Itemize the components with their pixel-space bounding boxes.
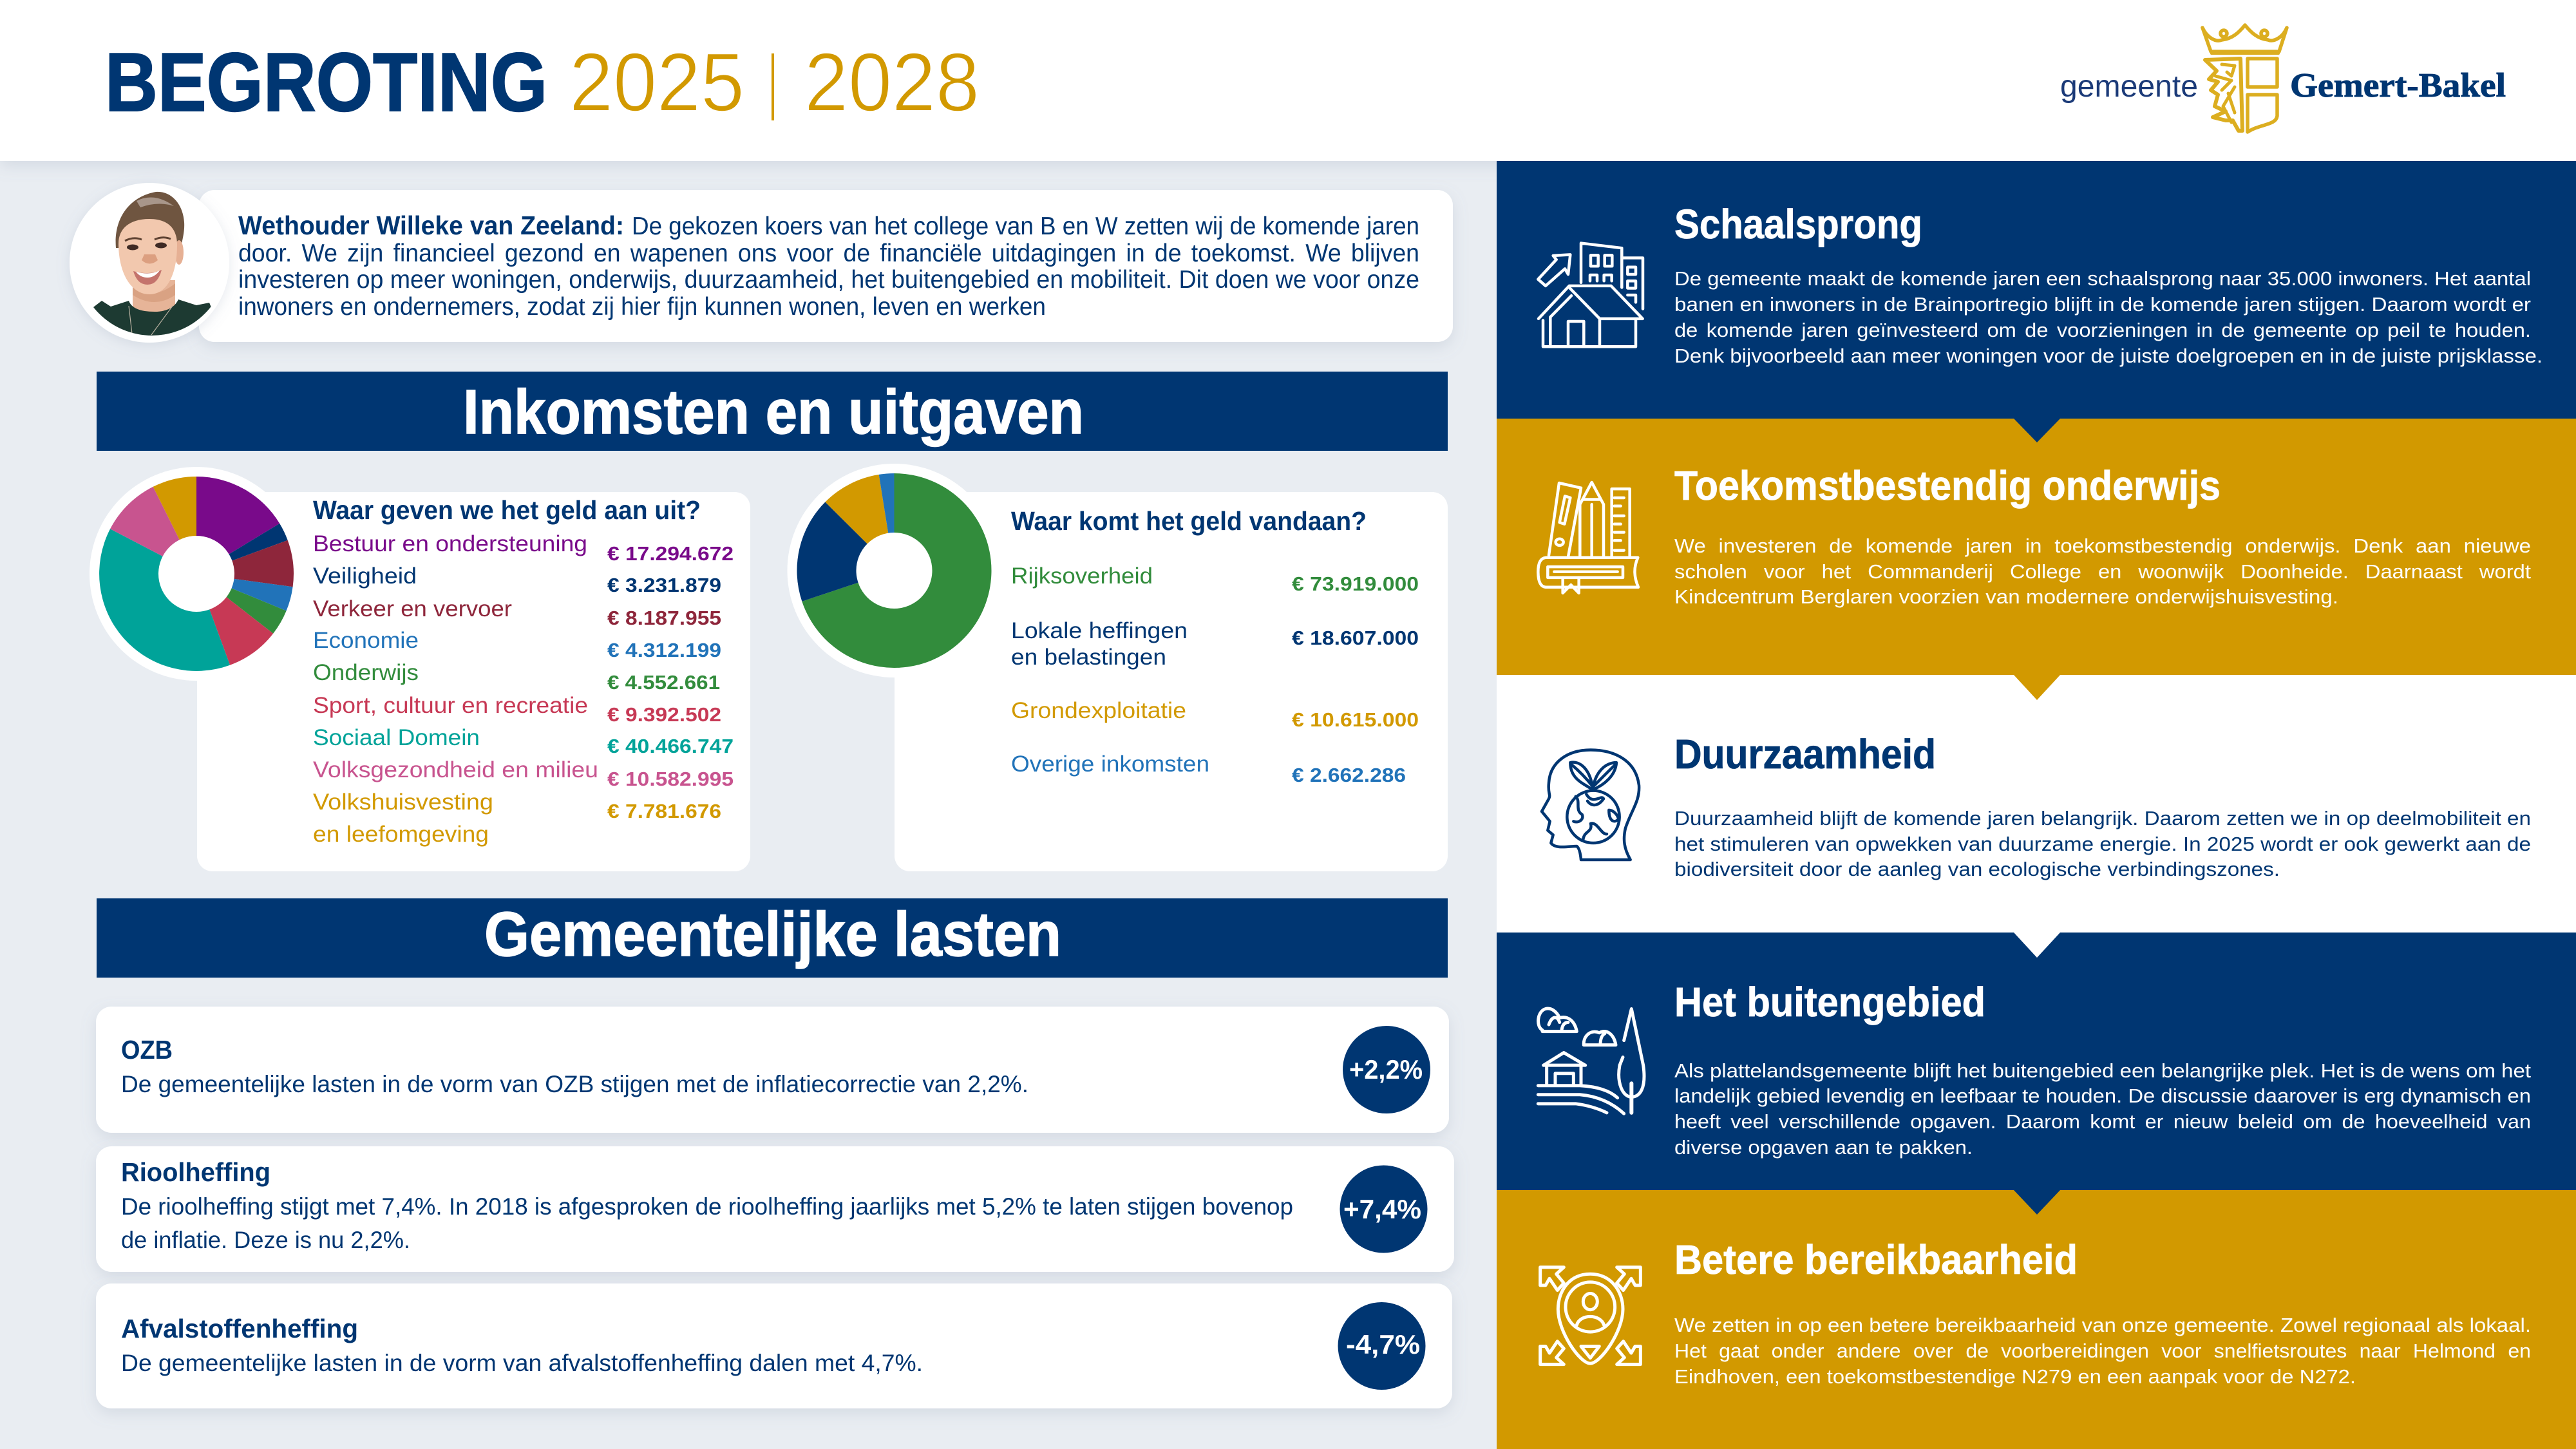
heading: Betere bereikbaarheid	[1674, 1236, 2078, 1283]
amounts: inkomsten: € 2.662.286	[1292, 764, 1406, 786]
amounts: inkomsten: € 18.607.000	[1292, 627, 1419, 649]
heading: inkomsten: Waar komt het geld vandaan?	[1011, 506, 1367, 536]
amounts: uitgaven	[607, 543, 734, 822]
body text: het stimuleren van opwekken van duurzame energie. In 2025 wordt er ook gewerkt aan de	[1674, 833, 2531, 855]
amounts: uitgaven: € 9.392.502	[607, 704, 721, 726]
legend: inkomsten categories: Lokale heffingen	[1011, 618, 1188, 643]
legend: uitgaven categories: Volkshuisvesting	[313, 790, 493, 815]
amounts: uitgaven: € 4.552.661	[607, 672, 720, 694]
donut chart: uitgaven	[90, 467, 303, 681]
legend: uitgaven categories: Veiligheid	[313, 564, 417, 589]
panel: OZB	[96, 1007, 1449, 1133]
body text	[1674, 535, 2531, 608]
panel: Afvalstoffenheffing: Afvalstoffenheffing	[121, 1314, 358, 1343]
title: BEGROTING	[105, 36, 547, 129]
legend: uitgaven categories: Sport, cultuur en recreatie	[313, 693, 588, 718]
title	[105, 36, 980, 129]
panel: Rioolheffing: de inflatie. Deze is nu 2,2%.	[121, 1227, 410, 1253]
body text: diverse opgaven aan te pakken.	[1674, 1136, 1973, 1159]
heading banner: Gemeentelijke lasten: Gemeentelijke lasten	[484, 899, 1061, 969]
body text: scholen voor het Commanderij College en woonwijk Doonheide. Daarnaast wordt	[1674, 560, 2531, 583]
heading: Toekomstbestendig onderwijs	[1674, 462, 2221, 509]
portrait photo	[70, 183, 229, 343]
legend: uitgaven categories: Verkeer en vervoer	[313, 596, 512, 621]
amounts: uitgaven: € 3.231.879	[607, 574, 721, 596]
body text	[1674, 807, 2531, 880]
panel: Rioolheffing	[96, 1146, 1454, 1272]
legend: uitgaven categories: en leefomgeving	[313, 822, 489, 847]
panel: OZB: OZB	[121, 1035, 173, 1065]
body text: De gemeente maakt de komende jaren een schaalsprong naar 35.000 inwoners. Het aantal	[1674, 267, 2531, 290]
intro text: inwoners en ondernemers, zodat zij hier fijn kunnen wonen, leven en werken	[238, 293, 1046, 321]
header band	[0, 0, 2576, 161]
heading banner: Inkomsten en uitgaven	[97, 372, 1448, 451]
badge: -4,7%: -4,7%	[1346, 1329, 1420, 1359]
body text	[1674, 1314, 2531, 1388]
panel: Afvalstoffenheffing	[96, 1283, 1452, 1408]
logo: gemeente Gemert-Bakel	[2060, 25, 2506, 132]
body text: landelijk gebied levendig en leefbaar te houden. De discussie daarover is erg dynamisch en	[1674, 1084, 2531, 1107]
badge: -4,7%	[1338, 1302, 1426, 1390]
body text: de komende jaren geïnvesteerd om de voorzieningen in de gemeente op peil te houden.	[1674, 319, 2531, 341]
body text: We investeren de komende jaren in toekomstbestendig onderwijs. Denk aan nieuwe	[1674, 535, 2531, 557]
legend: inkomsten categories: Overige inkomsten	[1011, 752, 1209, 777]
body text: Denk bijvoorbeeld aan meer woningen voor de juiste doelgroepen en in de juiste prijsklasse.	[1674, 345, 2543, 367]
icon: rural landscape with barn and tree	[1538, 1009, 1644, 1113]
legend: uitgaven categories: Economie	[313, 628, 419, 653]
arrow: gold to white	[2014, 675, 2060, 700]
heading banner: Gemeentelijke lasten	[97, 898, 1448, 978]
badge: +2,2%	[1343, 1026, 1430, 1113]
legend: inkomsten categories: Rijksoverheid	[1011, 564, 1153, 589]
heading: uitgaven: Waar geven we het geld aan uit?	[313, 495, 701, 525]
panel: Rioolheffing: De rioolheffing stijgt met 7,4%. In 2018 is afgesproken de rioolheffing jaarlijks met 5,2% te laten stijgen bovenop	[121, 1193, 1293, 1220]
heading banner: Inkomsten en uitgaven: Inkomsten en uitgaven	[463, 377, 1084, 447]
panel: Schaalsprong	[1497, 161, 2576, 419]
intro text: Wethouder Willeke van Zeeland:	[238, 211, 624, 240]
amounts: uitgaven: € 40.466.747	[607, 735, 734, 757]
legend: uitgaven categories: Bestuur en ondersteuning	[313, 531, 587, 556]
amounts: inkomsten: € 10.615.000	[1292, 709, 1419, 731]
legend: inkomsten categories: en belastingen	[1011, 645, 1166, 670]
amounts: uitgaven: € 8.187.955	[607, 607, 721, 629]
legend: uitgaven categories: Onderwijs	[313, 660, 419, 685]
legend: inkomsten categories: Grondexploitatie	[1011, 698, 1186, 723]
panel: Duurzaamheid	[1497, 675, 2576, 933]
panel: Afvalstoffenheffing: De gemeentelijke lasten in de vorm van afvalstoffenheffing dalen met 4,7%.	[121, 1350, 923, 1376]
legend: uitgaven categories: Sociaal Domein	[313, 725, 480, 750]
logo: gemeente Gemert-Bakel: gemeente	[2060, 70, 2198, 104]
panel: Het buitengebied	[1497, 933, 2576, 1190]
intro text	[238, 211, 1419, 321]
intro text: investeren op meer woningen, onderwijs, duurzaamheid, het buitengebied en mobiliteit. Dit doen we voor onze	[238, 266, 1419, 294]
badge: +2,2%: +2,2%	[1349, 1054, 1423, 1084]
body text	[1674, 267, 2543, 367]
panel: OZB: De gemeentelijke lasten in de vorm van OZB stijgen met de inflatiecorrectie van 2,2%.	[121, 1071, 1028, 1097]
body text: Kindcentrum Berglaren voorzien van modernere onderwijshuisvesting.	[1674, 585, 2338, 608]
panel: Betere bereikbaarheid	[1497, 1190, 2576, 1449]
heading: Schaalsprong	[1674, 201, 1922, 247]
amounts: uitgaven: € 17.294.672	[607, 543, 734, 565]
body text: Als plattelandsgemeente blijft het buitengebied een belangrijke plek. Het is de wens om het	[1674, 1059, 2531, 1082]
legend: uitgaven categories: Volksgezondheid en milieu	[313, 757, 598, 782]
legend: inkomsten categories	[1011, 564, 1209, 777]
body text: banen en inwoners in de Brainportregio blijft in de komende jaren stijgen. Daarom wordt er	[1674, 293, 2531, 316]
intro text: door. We zijn financieel gezond en wapenen ons voor de financiële uitdagingen in de toekomst. We blijven	[238, 240, 1419, 267]
heading: Duurzaamheid	[1674, 731, 1936, 777]
logo: gemeente Gemert-Bakel: Gemert-Bakel	[2290, 67, 2506, 104]
body text: Eindhoven, een toekomstbestendige N279 en een aanpak voor de N272.	[1674, 1365, 2356, 1388]
icon: location pin with arrows	[1540, 1267, 1640, 1365]
body text	[1674, 1059, 2531, 1159]
title: 2028	[804, 36, 980, 129]
icon: house and buildings with arrow	[1538, 243, 1643, 346]
legend: uitgaven categories	[313, 531, 598, 847]
amounts: inkomsten	[1292, 573, 1419, 786]
panel: waar geven we het geld aan uit	[90, 467, 750, 871]
title: 2025	[569, 36, 744, 129]
amounts: inkomsten: € 73.919.000	[1292, 573, 1419, 595]
panel: wethouder intro	[199, 190, 1453, 342]
panel: waar komt het geld vandaan	[787, 464, 1448, 871]
arrow: white to navy	[2014, 933, 2060, 958]
arrow: navy to gold	[2014, 419, 2060, 442]
body text: Het gaat onder andere over de voorbereidingen voor snelfietsroutes naar Helmond en	[1674, 1340, 2531, 1362]
intro text: De gekozen koers van het college van B en W zetten wij de komende jaren	[632, 213, 1419, 240]
badge: +7,4%: +7,4%	[1343, 1194, 1421, 1224]
icon: head with globe and plant	[1542, 750, 1639, 860]
amounts: uitgaven: € 7.781.676	[607, 800, 721, 822]
amounts: uitgaven: € 10.582.995	[607, 768, 734, 790]
arrow: navy to gold	[2014, 1190, 2060, 1215]
body text: biodiversiteit door de aanleg van ecologische verbindingszones.	[1674, 858, 2280, 880]
icon: books, pencil and ruler	[1538, 482, 1638, 593]
body text: We zetten in op een betere bereikbaarheid van onze gemeente. Zowel regionaal als lokaal.	[1674, 1314, 2531, 1336]
donut chart: inkomsten	[787, 464, 1001, 677]
body text: Duurzaamheid blijft de komende jaren belangrijk. Daarom zetten we in op deelmobiliteit en	[1674, 807, 2531, 829]
heading: Het buitengebied	[1674, 979, 1985, 1025]
body text: heeft veel verschillende opgaven. Daarom komt er nieuw beleid om de hoeveelheid van	[1674, 1110, 2531, 1133]
panel: Rioolheffing: Rioolheffing	[121, 1157, 270, 1187]
badge: +7,4%	[1340, 1166, 1427, 1253]
panel: Toekomstbestendig onderwijs	[1497, 419, 2576, 675]
amounts: uitgaven: € 4.312.199	[607, 639, 721, 661]
